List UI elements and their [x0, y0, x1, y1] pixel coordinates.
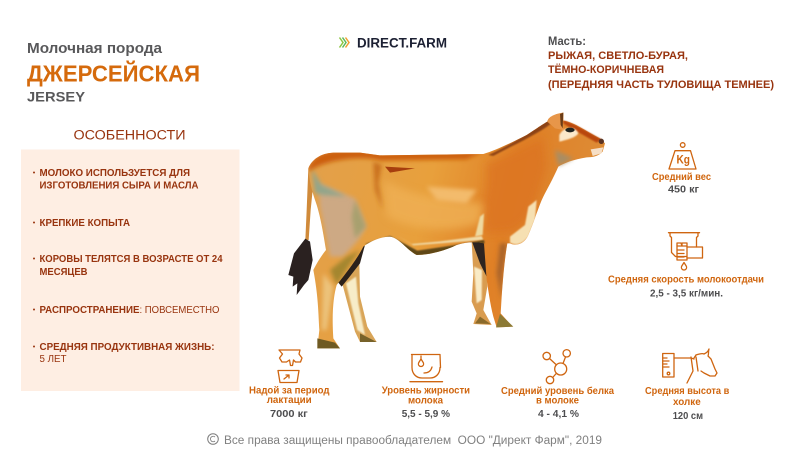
stat: milk protein: 4 - 4,1 % — [538, 409, 579, 420]
cow head details — [547, 113, 604, 166]
section heading: features: ОСОБЕННОСТИ — [74, 128, 186, 142]
stat: lactation yield: лактации — [267, 395, 312, 406]
coat colour text: (ПЕРЕДНЯЯ ЧАСТЬ ТУЛОВИЩА ТЕМНЕЕ) — [548, 79, 774, 91]
stat: lactation yield: 7000 кг — [270, 409, 308, 420]
stat: milk protein — [501, 350, 614, 420]
feature: productive life — [33, 342, 214, 365]
stat: height at withers: холке — [673, 397, 701, 408]
far hind leg — [338, 245, 377, 342]
icon: udder and bucket — [278, 350, 302, 382]
feature: calving age: МЕСЯЦЕВ — [40, 267, 88, 278]
feature: distribution: : ПОВСЕМЕСТНО — [140, 305, 220, 316]
stat: milk fat: молока — [408, 396, 443, 406]
stat: average weight: 450 кг — [668, 185, 699, 196]
illustration: Jersey cow — [288, 113, 605, 348]
copyright footer: Все права защищены правообладателем ООО "Директ Фарм", 2019 — [224, 435, 602, 447]
panel: features — [21, 150, 240, 391]
stat: milk protein: Средний уровень белка — [501, 385, 614, 397]
feature: calving age — [33, 254, 223, 278]
feature: milk use: МОЛОКО ИСПОЛЬЗУЕТСЯ ДЛЯ — [40, 168, 190, 179]
breed heading: ДЖЕРСЕЙСКАЯ — [27, 60, 200, 86]
cow tail — [288, 168, 313, 295]
logo: Direct.Farm: DIRECT.FARM — [357, 36, 447, 51]
body shading — [308, 121, 551, 330]
stat: lactation yield: Надой за период — [249, 385, 330, 396]
breed heading: Молочная порода — [27, 41, 163, 57]
flank fold mark — [385, 167, 415, 173]
coat colour text: Масть: — [548, 36, 586, 48]
coat colour text — [548, 36, 774, 91]
feature: milk use — [33, 168, 198, 192]
coat colour text: РЫЖАЯ, СВЕТЛО-БУРАЯ, — [548, 50, 688, 62]
far front leg — [472, 242, 492, 325]
stat: average weight: Средний вес — [652, 172, 711, 183]
icon: milk jug — [410, 354, 442, 382]
icon: molecule — [543, 350, 570, 384]
cow body — [308, 113, 605, 348]
stat: height at withers — [645, 349, 729, 422]
front hoof — [496, 314, 513, 327]
breed heading — [27, 41, 200, 104]
hind hoof — [317, 338, 340, 348]
feature: hooves: КРЕПКИЕ КОПЫТА — [40, 218, 130, 229]
stat: milking speed: 2,5 - 3,5 кг/мин. — [650, 289, 723, 300]
stat: milking speed — [608, 233, 764, 300]
feature: distribution — [33, 305, 220, 316]
stat: height at withers: Средняя высота в — [645, 386, 729, 397]
stat: lactation yield — [249, 350, 330, 420]
coat colour text: ТЁМНО-КОРИЧНЕВАЯ — [548, 63, 664, 76]
feature: calving age: КОРОВЫ ТЕЛЯТСЯ В ВОЗРАСТЕ ОТ 24 — [40, 254, 223, 265]
stat: milk fat — [382, 354, 470, 420]
icon: milking hand — [668, 233, 702, 270]
stat: milk fat: Уровень жирности — [382, 386, 470, 397]
icon: weight: Kg — [676, 154, 690, 166]
stat: milking speed: Средняя скорость молокоотдачи — [608, 275, 764, 286]
feature: distribution: РАСПРОСТРАНЕНИЕ — [40, 305, 140, 316]
feature: milk use: ИЗГОТОВЛЕНИЯ СЫРА И МАСЛА — [40, 180, 198, 192]
feature: productive life: 5 ЛЕТ — [40, 354, 67, 365]
stat: milk fat: 5,5 - 5,9 % — [402, 409, 450, 420]
icon: ruler and cow head — [663, 349, 717, 383]
feature: productive life: СРЕДНЯЯ ПРОДУКТИВНАЯ ЖИЗНЬ: — [40, 342, 214, 353]
breed heading: JERSEY — [27, 88, 86, 104]
stat: height at withers: 120 см — [673, 411, 703, 422]
stat: milk protein: в молоке — [536, 396, 579, 406]
stat: average weight — [652, 143, 711, 196]
